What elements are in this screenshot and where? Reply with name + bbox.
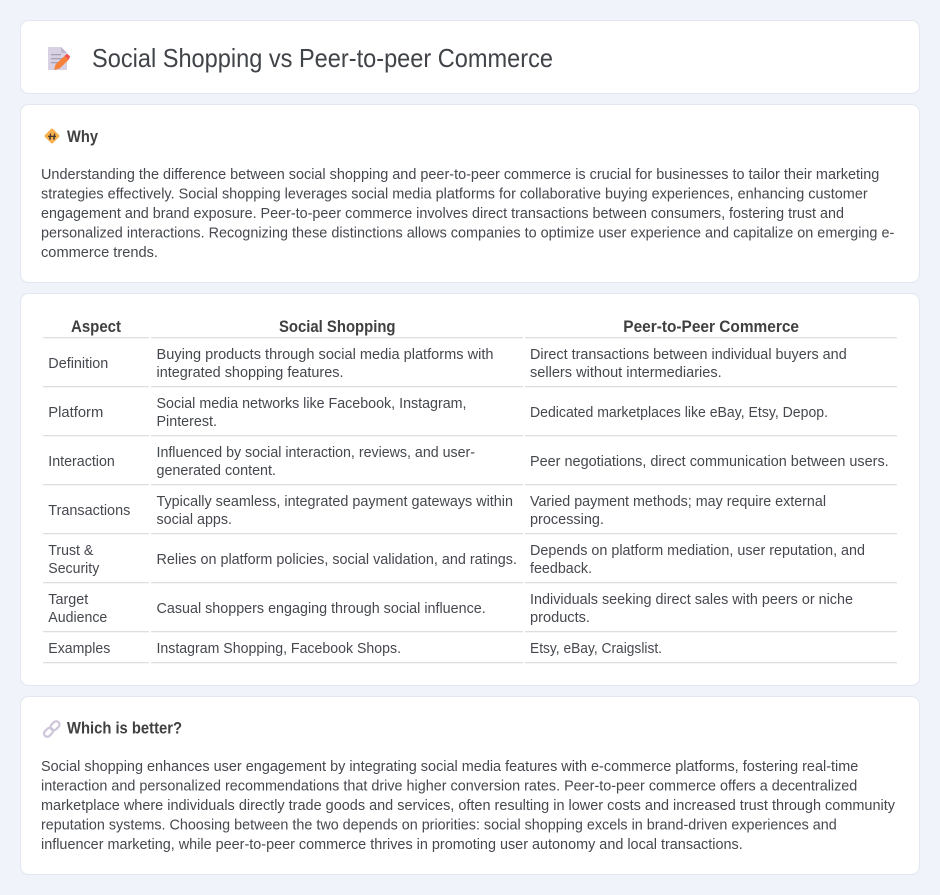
table row: interaction: Peer negotiations, direct communication between users. (530, 454, 889, 470)
text block: why paragraph: strategies effectively. Social shopping leverages social media platforms for collaborative buying experiences, enhancing customer (41, 186, 868, 202)
icon: chain link (43, 720, 61, 738)
table row: trust and security: feedback. (530, 561, 592, 577)
table row: interaction (48, 445, 889, 479)
title: Social Shopping vs Peer-to-peer Commerce (92, 43, 553, 73)
table row: interaction: generated content. (156, 463, 276, 479)
table row: definition: Direct transactions between individual buyers and (530, 347, 847, 363)
panel: which is better (20, 696, 920, 874)
table row: examples: Etsy, eBay, Craigslist. (530, 641, 662, 657)
text block: why paragraph: commerce trends. (41, 245, 158, 261)
table row: examples (48, 641, 662, 657)
table header row (71, 318, 799, 336)
table row: interaction: Interaction (48, 454, 115, 470)
text block: why paragraph (41, 167, 894, 261)
table row: interaction: Influenced by social interaction, reviews, and user- (156, 445, 475, 461)
icon: document with pencil (48, 47, 70, 70)
panel: comparison table (20, 294, 920, 686)
table row: examples: Examples (48, 641, 110, 657)
table row: trust and security: Depends on platform mediation, user reputation, and (530, 543, 865, 559)
panel: why (20, 104, 920, 282)
table row: target audience (48, 592, 853, 626)
table row: target audience: Target (48, 592, 88, 608)
table row: target audience: Casual shoppers engaging through social influence. (156, 601, 486, 617)
icon: warning diamond (44, 128, 60, 144)
text block: verdict paragraph: marketplace where individuals directly trade goods and services, often resulting in lower costs and increased trust through community (41, 798, 896, 814)
table row: transactions (48, 494, 826, 528)
table row: target audience: products. (530, 610, 590, 626)
text block: verdict paragraph (41, 759, 896, 853)
table row: definition: sellers without intermediaries. (530, 365, 722, 381)
text block: verdict paragraph: reputation systems. Choosing between the two depends on priorities: social shopping excels in brand-driven experiences and (41, 818, 837, 834)
table row: transactions: Transactions (48, 503, 130, 519)
table row: examples: Instagram Shopping, Facebook Shops. (156, 641, 401, 657)
table header row: Aspect (71, 318, 121, 336)
table row: platform (48, 396, 828, 430)
table row: platform: Pinterest. (156, 414, 217, 430)
table header row: Social Shopping (279, 318, 396, 336)
text block: why paragraph: personalized interactions. Recognizing these distinctions allows companies to optimize user experience and capitalize on emerging e- (41, 226, 894, 242)
table row: trust and security: Security (48, 561, 100, 577)
table row: transactions: Varied payment methods; may require external (530, 494, 826, 510)
text block: verdict paragraph: interaction and personalized recommendations that drive higher conversion rates. Peer-to-peer commerce offers a decentralized (41, 778, 857, 794)
text block: why paragraph: Understanding the difference between social shopping and peer-to-peer commerce is crucial for businesses to tailor their marketing (41, 167, 879, 183)
table row: definition (48, 347, 847, 381)
table row: platform: Social media networks like Facebook, Instagram, (156, 396, 466, 412)
table row: platform: Dedicated marketplaces like eBay, Etsy, Depop. (530, 405, 828, 421)
heading: why: Why (67, 128, 99, 146)
table row: definition: integrated shopping features. (156, 365, 344, 381)
table row: trust and security: Trust & (48, 543, 94, 559)
table header row: Peer-to-Peer Commerce (623, 318, 799, 336)
table row: target audience: Audience (48, 610, 107, 626)
panel: title header (20, 20, 920, 94)
table row: platform: Platform (48, 405, 103, 421)
table row: transactions: social apps. (156, 512, 232, 528)
heading: which is better: Which is better? (67, 720, 182, 738)
table row: transactions: processing. (530, 512, 604, 528)
text block: verdict paragraph: influencer marketing, while peer-to-peer commerce thrives in promoting user autonomy and local transactions. (41, 837, 743, 853)
table row: trust and security (48, 543, 865, 577)
text block: why paragraph: engagement and brand exposure. Peer-to-peer commerce involves direct transactions between consumers, fostering trust and (41, 206, 844, 222)
table row: definition: Definition (48, 356, 108, 372)
text block: verdict paragraph: Social shopping enhances user engagement by integrating social media features with e-commerce platforms, fostering real-time (41, 759, 858, 775)
table row: trust and security: Relies on platform policies, social validation, and ratings. (156, 552, 517, 568)
table row: transactions: Typically seamless, integrated payment gateways within (156, 494, 513, 510)
table row: definition: Buying products through social media platforms with (156, 347, 493, 363)
table row: target audience: Individuals seeking direct sales with peers or niche (530, 592, 853, 608)
